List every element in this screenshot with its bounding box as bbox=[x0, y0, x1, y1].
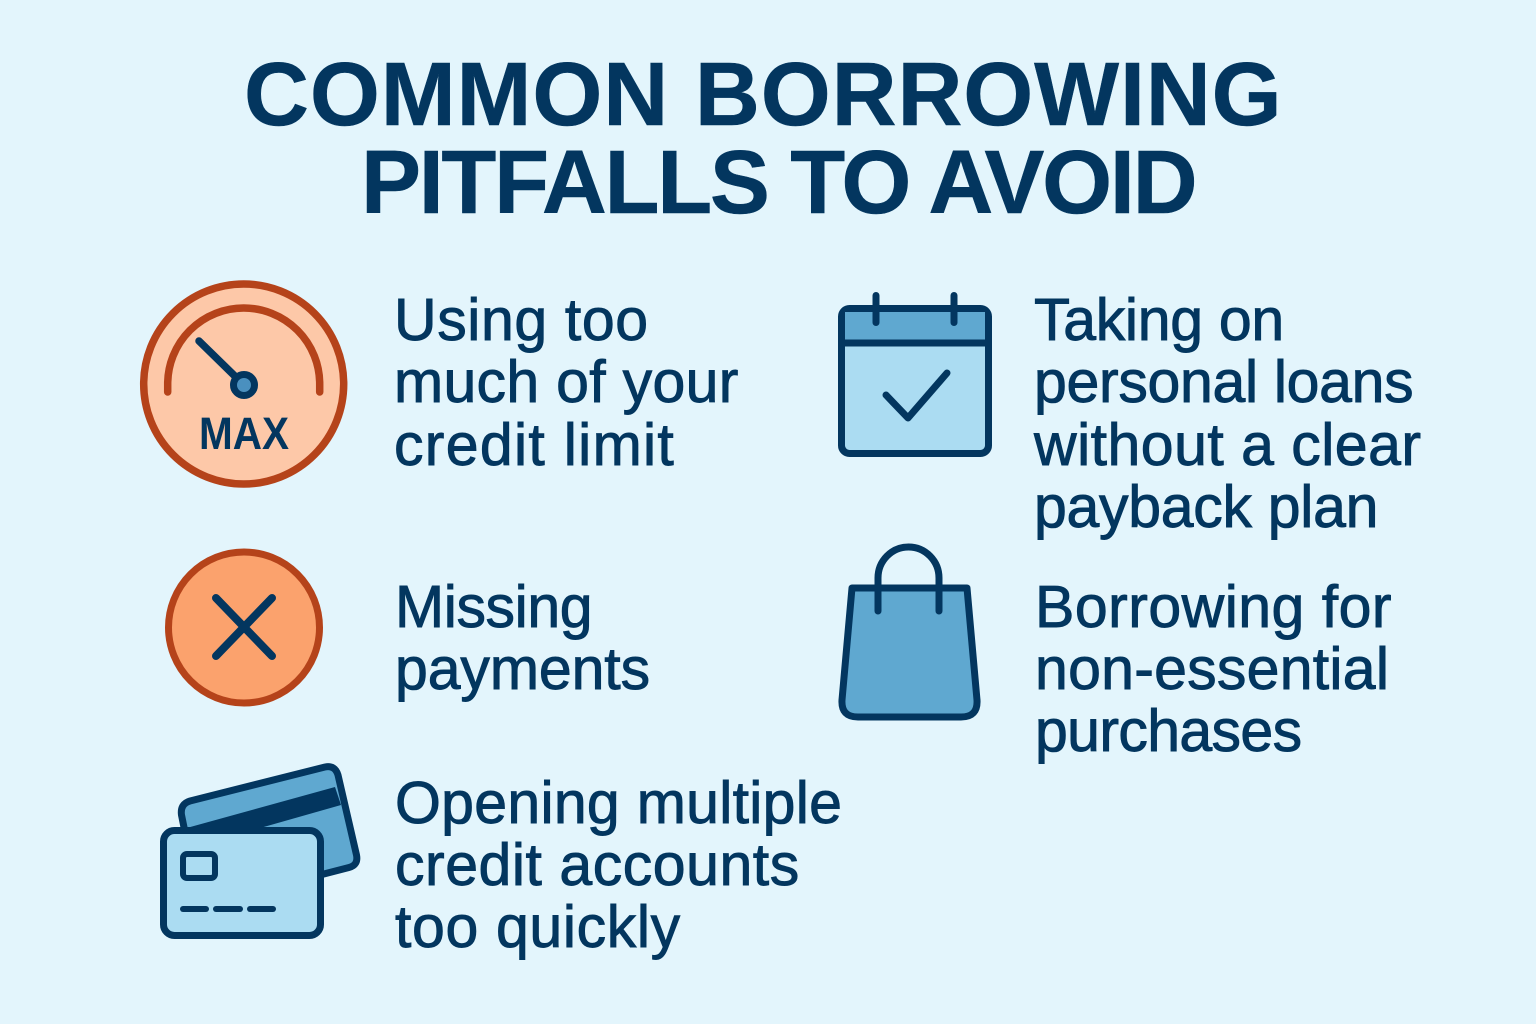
text: borrowing for non-essential purchases: Borrowing for bbox=[1035, 574, 1392, 640]
text: missing payments bbox=[395, 574, 650, 702]
icon: gauge MAX bbox=[144, 284, 344, 484]
text: using too much of your credit limit bbox=[394, 287, 739, 478]
text: opening multiple credit accounts too quickly: Opening multiple bbox=[395, 770, 842, 836]
text: borrowing for non-essential purchases bbox=[1035, 574, 1392, 764]
text: opening multiple credit accounts too quickly: credit accounts bbox=[395, 832, 800, 898]
text: using too much of your credit limit: Using too bbox=[394, 287, 649, 353]
text: borrowing for non-essential purchases: purchases bbox=[1035, 698, 1301, 764]
text: using too much of your credit limit: credit limit bbox=[394, 412, 675, 478]
text: taking on personal loans without a clear payback plan bbox=[1033, 287, 1421, 540]
icon: credit cards bbox=[164, 767, 357, 936]
icon: missed payment X bbox=[168, 552, 320, 703]
text: taking on personal loans without a clear payback plan: payback plan bbox=[1034, 474, 1378, 540]
text: opening multiple credit accounts too quickly bbox=[395, 770, 842, 960]
text: borrowing for non-essential purchases: non-essential bbox=[1035, 636, 1389, 702]
text: missing payments: payments bbox=[395, 636, 650, 702]
text: taking on personal loans without a clear payback plan: Taking on bbox=[1034, 287, 1284, 353]
title bbox=[244, 45, 1282, 233]
icon: calendar bbox=[842, 296, 988, 454]
text: using too much of your credit limit: much of your bbox=[394, 349, 739, 415]
title: COMMON BORROWING bbox=[244, 45, 1282, 145]
text: opening multiple credit accounts too quickly: too quickly bbox=[395, 894, 681, 960]
icon: gauge MAX: MAX bbox=[199, 408, 289, 459]
text: missing payments: Missing bbox=[395, 574, 592, 640]
text: taking on personal loans without a clear payback plan: without a clear bbox=[1034, 412, 1421, 478]
icon: shopping bag bbox=[842, 547, 977, 717]
text: taking on personal loans without a clear payback plan: personal loans bbox=[1034, 349, 1413, 415]
title: PITFALLS TO AVOID bbox=[361, 133, 1195, 233]
